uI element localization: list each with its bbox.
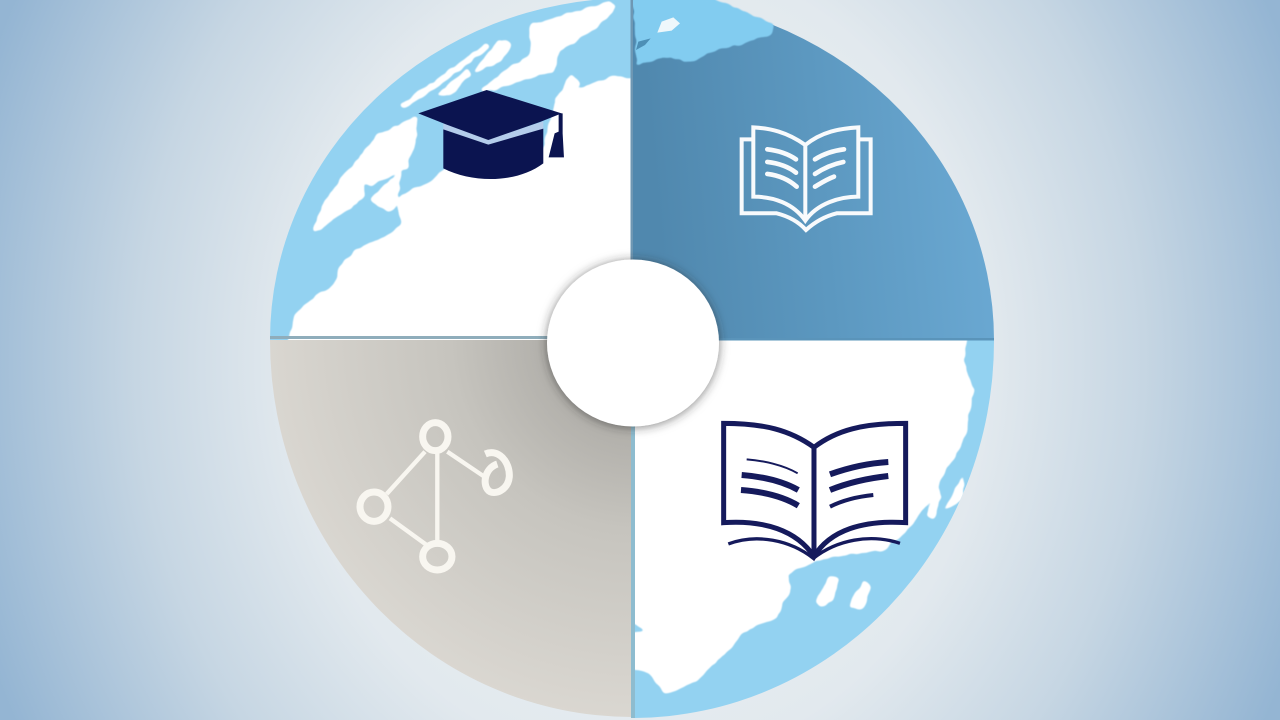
globe wheel bbox=[270, 0, 994, 718]
panel: upper-right blue quadrant bbox=[633, 0, 994, 340]
icon: open book outline white bbox=[742, 127, 871, 230]
icon: open book navy bbox=[724, 423, 906, 558]
landmass: upper-left bbox=[287, 2, 640, 347]
landmass: lower-right bbox=[630, 333, 973, 694]
panel: upper-left globe quadrant bbox=[270, 0, 640, 347]
center circle bbox=[547, 260, 719, 426]
quadrant dividers bbox=[270, 0, 994, 718]
panel: lower-left gray quadrant bbox=[270, 340, 632, 717]
landmass: upper-right sky area bbox=[633, 0, 774, 65]
icon: network nodes bbox=[360, 423, 509, 570]
icon: graduation cap bbox=[418, 90, 564, 179]
panel: lower-right globe quadrant bbox=[630, 333, 994, 718]
